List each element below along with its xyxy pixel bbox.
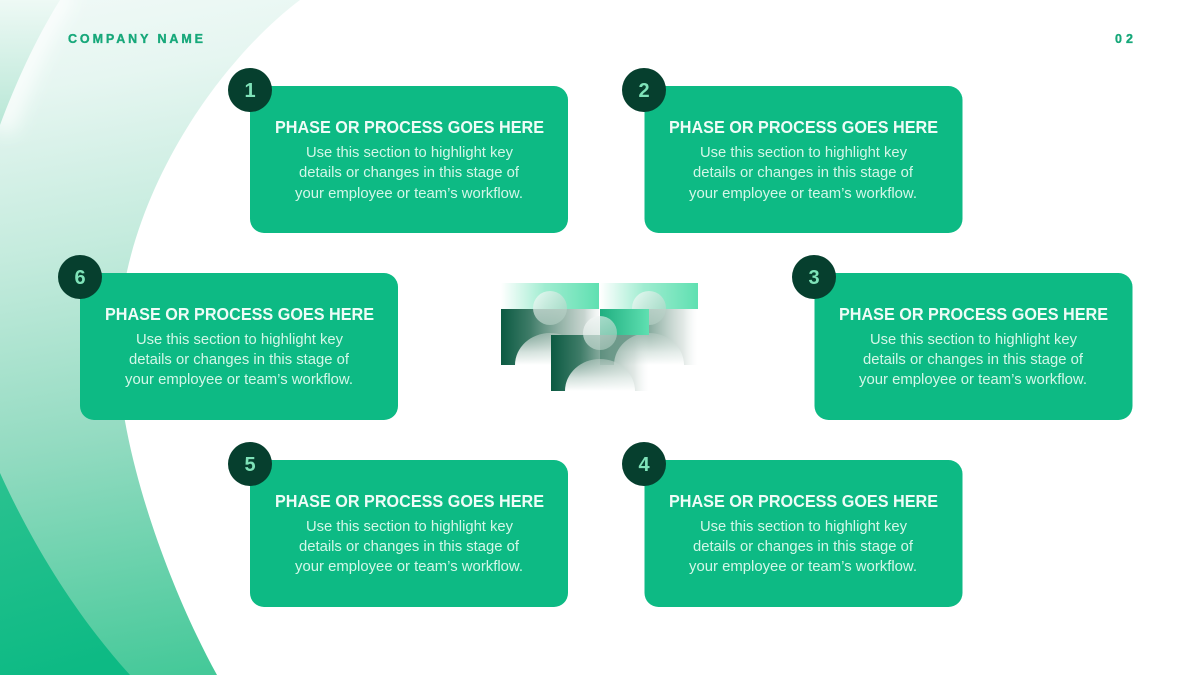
card 3: Use this section to highlight key: [870, 332, 1078, 348]
card 3: your employee or team’s workflow.: [859, 372, 1087, 388]
card 5: details or changes in this stage of: [299, 539, 520, 555]
card 4: 4: [638, 454, 650, 476]
card 1: your employee or team’s workflow.: [295, 186, 523, 202]
card 3: details or changes in this stage of: [863, 352, 1084, 368]
card 2: details or changes in this stage of: [693, 165, 914, 181]
card 1: [228, 68, 568, 233]
page number: 02: [1115, 32, 1133, 46]
icon: team of three people: [501, 283, 698, 391]
card 5: 5: [244, 454, 256, 476]
card 4: your employee or team’s workflow.: [689, 559, 917, 575]
card 1: details or changes in this stage of: [299, 165, 520, 181]
card 4: [622, 442, 962, 607]
card 2: Use this section to highlight key: [700, 145, 908, 161]
card 1: PHASE OR PROCESS GOES HERE: [275, 117, 544, 137]
background corner shape bottom: [0, 473, 130, 675]
card 6: your employee or team’s workflow.: [125, 372, 353, 388]
card 6: PHASE OR PROCESS GOES HERE: [105, 304, 374, 324]
card 6: 6: [74, 267, 86, 289]
person right: [600, 283, 698, 365]
card 4: PHASE OR PROCESS GOES HERE: [669, 491, 938, 511]
card 2: PHASE OR PROCESS GOES HERE: [669, 117, 938, 137]
card 3: [792, 255, 1132, 420]
background curved band: [0, 0, 300, 675]
company name: COMPANY NAME: [68, 32, 203, 46]
card 1: Use this section to highlight key: [306, 145, 514, 161]
card 5: your employee or team’s workflow.: [295, 559, 523, 575]
person front: [551, 309, 649, 391]
card 2: 2: [638, 80, 650, 102]
card 3: PHASE OR PROCESS GOES HERE: [839, 304, 1108, 324]
card 2: [622, 68, 962, 233]
card 6: Use this section to highlight key: [136, 332, 344, 348]
person left: [501, 283, 599, 365]
card 6: details or changes in this stage of: [129, 352, 350, 368]
card 4: details or changes in this stage of: [693, 539, 914, 555]
card 5: PHASE OR PROCESS GOES HERE: [275, 491, 544, 511]
card 5: Use this section to highlight key: [306, 519, 514, 535]
card 2: your employee or team’s workflow.: [689, 186, 917, 202]
card 5: [228, 442, 568, 607]
card 1: 1: [244, 80, 256, 102]
background corner shape top: [0, 0, 60, 125]
card 4: Use this section to highlight key: [700, 519, 908, 535]
card 6: [58, 255, 398, 420]
card 3: 3: [808, 267, 820, 289]
